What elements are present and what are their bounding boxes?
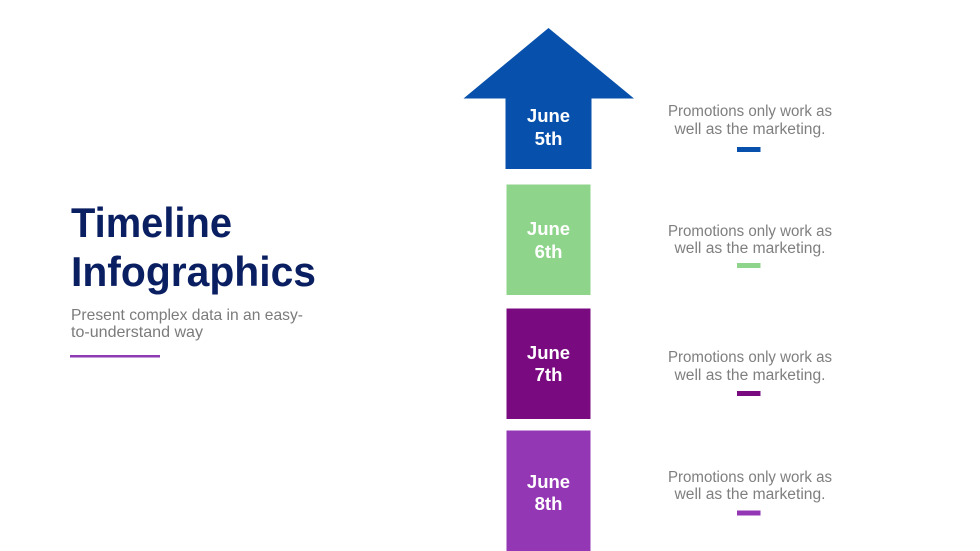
timeline step: June 8th block: June xyxy=(527,471,570,492)
description: June 5th: Promotions only work as xyxy=(668,103,832,120)
title xyxy=(71,199,316,295)
title: Timeline xyxy=(71,199,232,246)
timeline step: June 7th block: June xyxy=(527,342,570,363)
title: Infographics xyxy=(71,248,316,295)
description: June 7th: Promotions only work as xyxy=(668,349,832,366)
timeline step: June 7th block: 7th xyxy=(535,364,562,385)
timeline step: June 8th block xyxy=(506,430,590,551)
subtitle text: Present complex data in an easy- xyxy=(71,307,303,324)
date label: June xyxy=(527,105,570,126)
timeline step: June 6th block: June xyxy=(527,218,570,239)
date label: 5th xyxy=(535,128,562,149)
description: June 8th: well as the marketing. xyxy=(673,486,826,503)
description: June 8th: Promotions only work as xyxy=(668,469,832,486)
description: June 6th xyxy=(668,223,832,268)
timeline step: June 8th block: 8th xyxy=(535,493,562,514)
title accent underline xyxy=(70,355,160,358)
description: June 7th xyxy=(668,349,832,396)
description: June 8th xyxy=(668,469,832,516)
timeline step: June 7th block xyxy=(506,308,590,419)
description: June 5th xyxy=(668,103,832,152)
subtitle text: to-understand way xyxy=(71,324,203,341)
description: June 6th: well as the marketing. xyxy=(673,240,826,257)
timeline step: June 5th arrow xyxy=(464,28,634,169)
description: June 6th: Promotions only work as xyxy=(668,223,832,240)
arrow shape xyxy=(464,28,634,169)
subtitle text xyxy=(71,307,303,341)
timeline step: June 6th block: 6th xyxy=(535,241,562,262)
description: June 7th: well as the marketing. xyxy=(673,367,826,384)
description: June 5th: well as the marketing. xyxy=(673,121,826,138)
timeline step: June 6th block xyxy=(506,184,590,295)
